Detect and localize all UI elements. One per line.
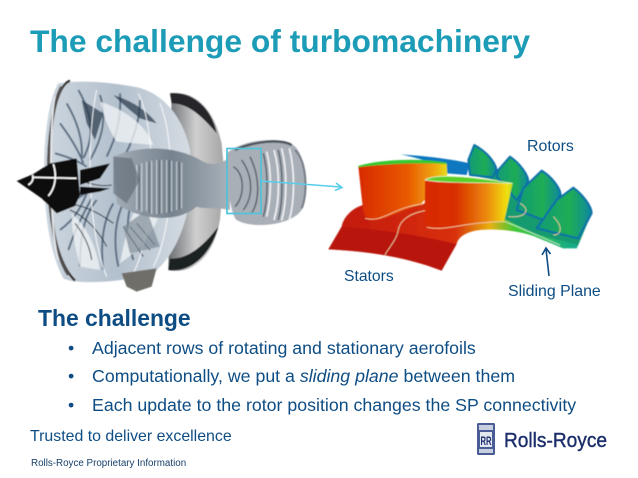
- label: sliding plane: Sliding Plane: [508, 283, 601, 300]
- footer note: Rolls-Royce Proprietary Information: [31, 458, 186, 469]
- logo: Rolls-Royce: [477, 423, 607, 455]
- label: stators: Stators: [344, 268, 394, 285]
- engine illustration: [17, 81, 306, 292]
- logo badge: RR: [480, 434, 492, 448]
- rotors: [468, 145, 592, 238]
- fan rim: [48, 81, 75, 281]
- bullet 1: Adjacent rows of rotating and stationary aerofoils: [92, 338, 476, 358]
- rear nacelle ring: [168, 93, 224, 271]
- bullet 2: Computationally, we put a: [92, 366, 300, 386]
- callout arrow: [261, 181, 342, 190]
- bullet list: [68, 338, 576, 415]
- fan blades: [55, 90, 140, 270]
- fan casing: [44, 82, 191, 282]
- title: The challenge of turbomachinery: [30, 23, 530, 59]
- arrow: sliding plane: [542, 248, 550, 276]
- bullet 2: •: [68, 366, 74, 386]
- highlight box: [227, 148, 261, 214]
- bullet 3: Each update to the rotor position changes the SP connectivity: [92, 395, 576, 415]
- bullet 3: •: [68, 395, 74, 415]
- stator blades: [358, 160, 447, 220]
- bullet 2: sliding plane between them: [300, 366, 515, 386]
- core compressor: [113, 148, 230, 218]
- logo wordmark: Rolls-Royce: [504, 429, 607, 452]
- bullet 1: •: [68, 338, 74, 358]
- stator platform: [328, 203, 578, 271]
- blade CFD model: [328, 145, 592, 271]
- sliding plane edge: [505, 222, 560, 245]
- mesh lines: [365, 203, 560, 255]
- rotor backing: [468, 170, 592, 248]
- tagline: Trusted to deliver excellence: [30, 428, 232, 445]
- turbine section: [227, 140, 306, 225]
- back rotor sheet: [401, 154, 470, 175]
- heading: the challenge: The challenge: [38, 305, 191, 331]
- accessory gearbox: [122, 268, 157, 292]
- label: rotors: Rotors: [527, 138, 574, 155]
- nose cone and spinner: [17, 158, 80, 213]
